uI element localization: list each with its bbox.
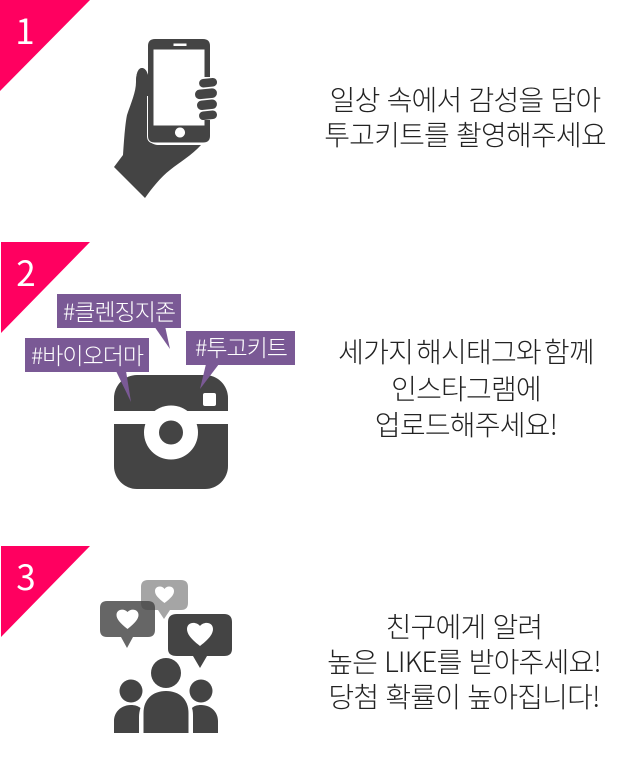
step 2 text: 세가지 해시태그와 함께 — [338, 331, 594, 371]
step 2 text: 인스타그램에 — [391, 368, 541, 408]
step 1 text: 일상 속에서 감성을 담아 — [330, 79, 600, 119]
dark bubble — [168, 614, 232, 668]
step 1 text: 투고키트를 촬영해주세요 — [324, 114, 606, 154]
icon: hand holding phone — [114, 38, 217, 198]
badge 2 — [1, 242, 90, 333]
step 3 text — [327, 606, 601, 716]
step 2 text: 업로드해주세요! — [375, 404, 557, 444]
step 2 text — [338, 331, 594, 444]
light bubble — [141, 580, 188, 619]
tag: 클렌징지존 — [57, 293, 181, 349]
icon: camera — [114, 375, 228, 489]
people — [114, 658, 218, 733]
tag: 클렌징지존: #클렌징지존 — [63, 293, 175, 327]
badge 3: 3 — [16, 550, 36, 601]
tag: 바이오더마 — [25, 337, 149, 402]
step 1 text — [324, 79, 606, 154]
tag: 투고키트 — [186, 329, 295, 389]
badge 2: 2 — [16, 246, 36, 297]
icon: people with heart bubbles — [100, 580, 232, 733]
step 3 text: 당첨 확률이 높아집니다! — [328, 676, 600, 716]
badge 1 — [0, 0, 90, 91]
step 3 text: 친구에게 알려 — [386, 606, 542, 646]
badge 3 — [1, 546, 90, 637]
step 3 text: 높은 LIKE를 받아주세요! — [327, 641, 601, 681]
badge 1: 1 — [15, 4, 35, 55]
medium bubble — [100, 601, 155, 648]
tag: 투고키트: #투고키트 — [195, 329, 287, 363]
tag: 바이오더마: #바이오더마 — [31, 337, 144, 371]
